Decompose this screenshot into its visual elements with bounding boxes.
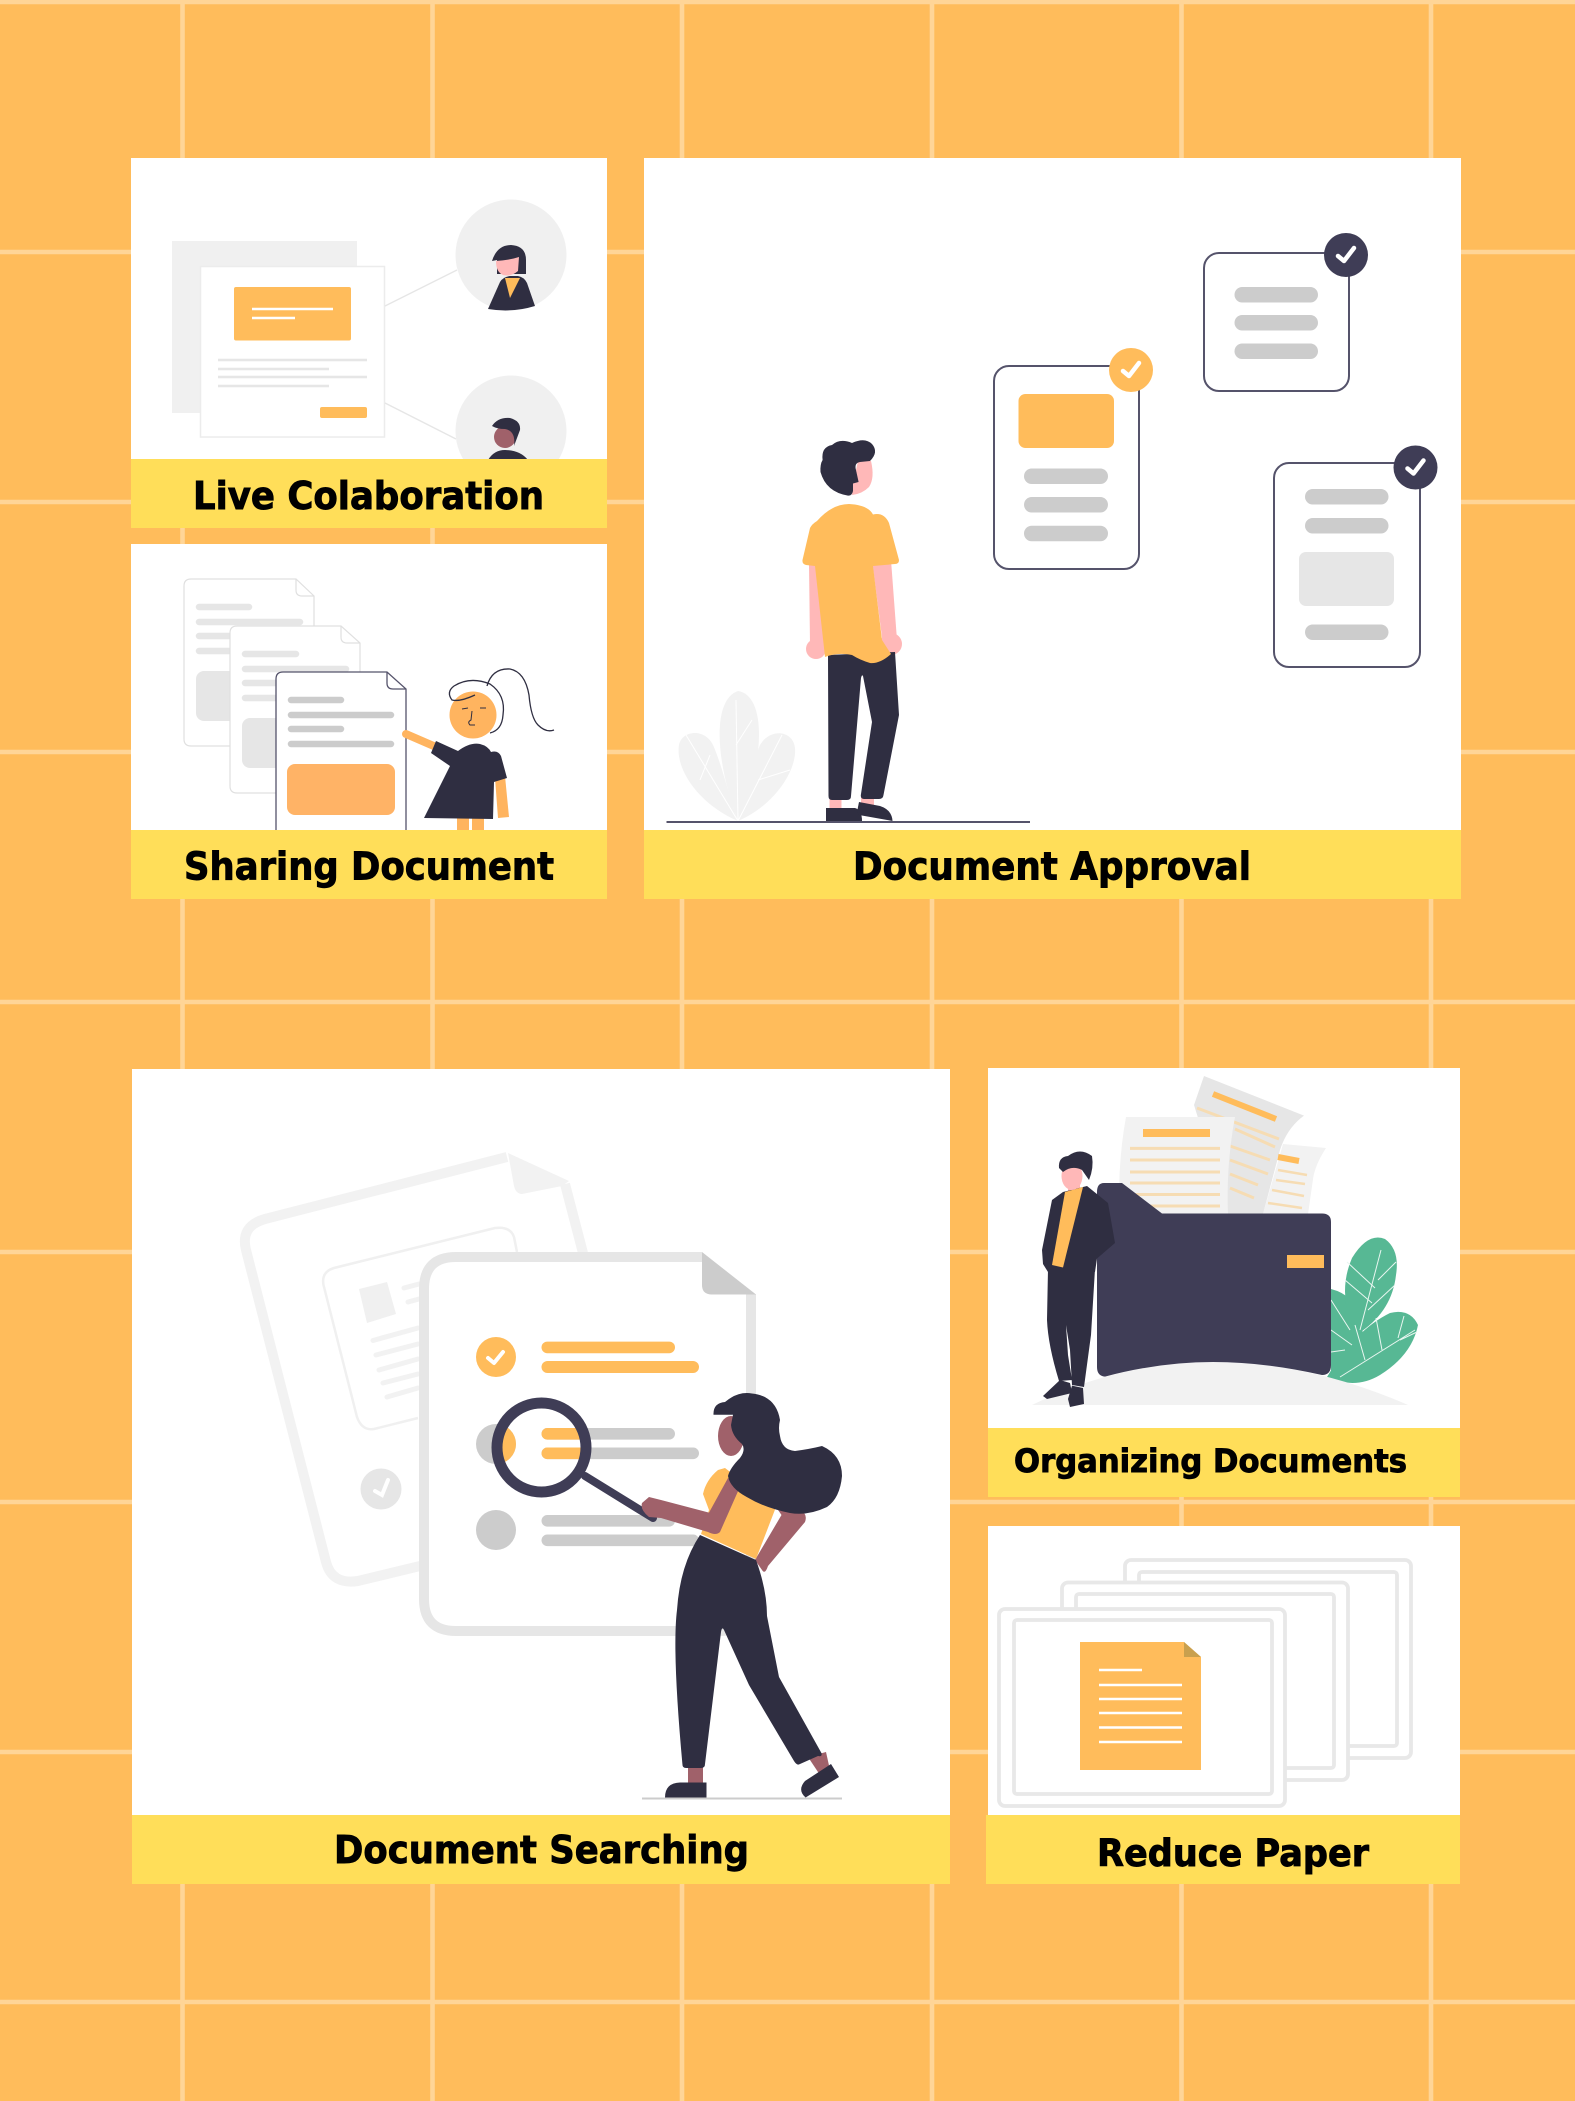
- illustration: document with orange header: [172, 241, 384, 437]
- avatar: man: [456, 376, 566, 486]
- person standing: [802, 440, 902, 821]
- panel: document approval: [644, 158, 1461, 899]
- connector lines: [385, 270, 457, 439]
- ground line: [642, 1798, 842, 1800]
- woman searching: [642, 1393, 842, 1798]
- label bar: [132, 1815, 950, 1884]
- folder: [1097, 1183, 1331, 1377]
- panel: sharing document: [131, 544, 607, 899]
- panel: reduce paper: [986, 1526, 1460, 1884]
- plant: [1327, 1238, 1418, 1383]
- heading: Live Colaboration: Live Colaboration: [193, 474, 544, 519]
- illustration: stacked documents: [184, 579, 406, 835]
- avatar: woman: [456, 200, 566, 310]
- label bar: [644, 830, 1461, 899]
- plant: [679, 691, 795, 821]
- label bar: [131, 830, 607, 899]
- panel: live collaboration: [131, 158, 607, 528]
- front document: [424, 1252, 756, 1631]
- heading: Document Approval: Document Approval: [853, 844, 1251, 890]
- heading: Organizing Documents: Organizing Documents: [1014, 1442, 1407, 1480]
- panel: document searching: [132, 1069, 950, 1884]
- illustration: girl pointing: [406, 669, 554, 830]
- heading: Sharing Document: Sharing Document: [184, 844, 554, 890]
- front frame: [999, 1609, 1285, 1806]
- back frames: [1062, 1560, 1411, 1780]
- orange document icon: [1080, 1642, 1201, 1770]
- panel: organizing documents: [988, 1068, 1460, 1497]
- card: image and lines checked: [1274, 446, 1438, 667]
- paper sheets: [1119, 1076, 1326, 1214]
- man leaning on folder: [1042, 1152, 1115, 1407]
- label bar: [131, 459, 607, 528]
- ground line: [666, 821, 1030, 823]
- heading: Reduce Paper: Reduce Paper: [1097, 1832, 1370, 1875]
- label bar: [988, 1428, 1460, 1497]
- magnifying glass: [492, 1398, 657, 1522]
- card: three lines checked: [1204, 233, 1368, 391]
- card: orange checked: [994, 348, 1153, 569]
- heading: Document Searching: Document Searching: [334, 1828, 749, 1873]
- back document: [245, 1153, 583, 1582]
- ground hill: [1032, 1362, 1408, 1405]
- label bar: [986, 1815, 1460, 1884]
